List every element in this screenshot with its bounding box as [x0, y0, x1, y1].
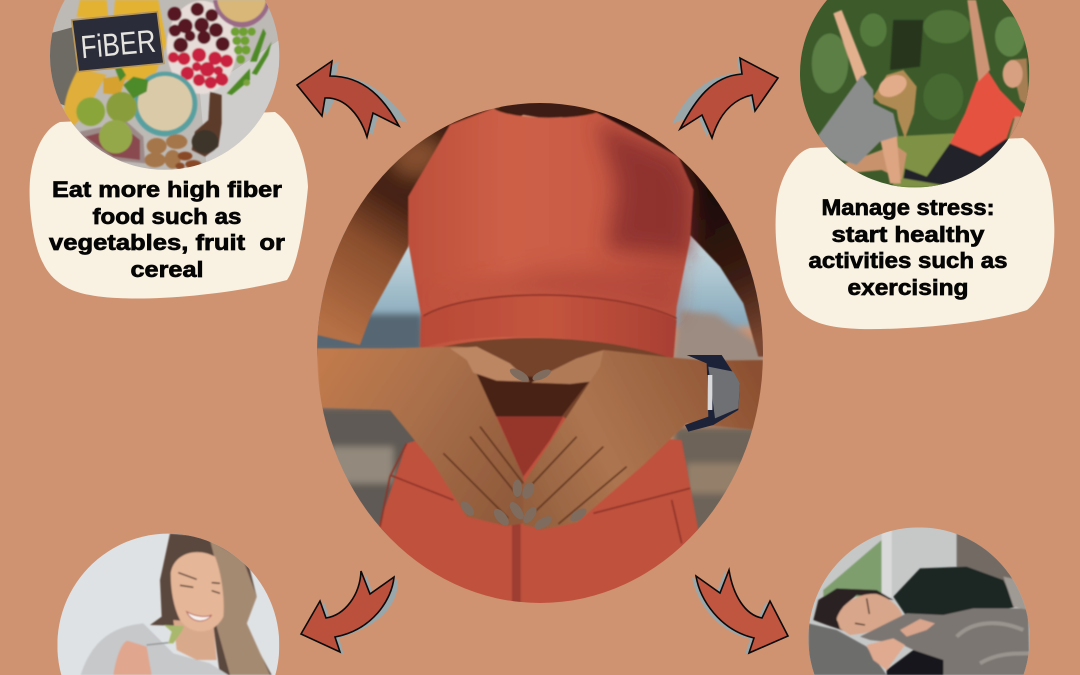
crop top band [422, 300, 678, 358]
shoulder highlight [387, 133, 447, 180]
photo backdrop: sky and rocks [310, 227, 770, 537]
photo: woman eating salad [57, 533, 279, 675]
face grey shirt [878, 74, 908, 98]
fork and salad [147, 643, 168, 645]
spoon with seeds [192, 92, 222, 157]
sleeve [887, 650, 943, 675]
chalkboard sign: FiBER [79, 23, 157, 65]
panel: manage stress [776, 0, 1054, 329]
curtains [957, 527, 1030, 594]
caption: stress [808, 195, 1008, 300]
left arm and shoulder [318, 107, 524, 346]
bananas [77, 0, 167, 80]
pillow [808, 623, 887, 675]
smart watch [685, 355, 740, 432]
window [823, 540, 882, 597]
head red shirt [1010, 58, 1029, 107]
arrow: to stress [672, 57, 778, 138]
hands [900, 619, 935, 637]
face [837, 594, 902, 635]
right hand and forearm [523, 350, 763, 529]
peas [231, 27, 256, 64]
hair [150, 533, 272, 675]
dark trousers [902, 138, 1008, 185]
pears [76, 97, 105, 126]
shadow on crop top [597, 120, 693, 257]
panel: high fiber food [30, 0, 308, 299]
grey shirt [815, 75, 898, 165]
shirt [81, 623, 228, 675]
thumbs [450, 347, 529, 382]
crop top [408, 108, 693, 360]
cherry and raspberry plate [167, 1, 237, 94]
grass [890, 133, 1013, 187]
red shirt [950, 72, 1024, 156]
cream text card [776, 138, 1054, 329]
arrow: to fiber [297, 61, 408, 137]
eyes and brows [178, 573, 220, 593]
hand [113, 641, 152, 675]
chalkboard sign [72, 12, 164, 72]
sweater [893, 567, 1017, 623]
fingernails [458, 366, 589, 532]
leaves [115, 65, 148, 98]
caption: fiber [49, 177, 285, 282]
caption: fiber: cereal [130, 257, 204, 282]
blonde hair [873, 70, 917, 138]
caption: fiber: food such as [92, 204, 242, 229]
caption: stress: start healthy [832, 222, 985, 247]
caption: stress: activities such as [808, 248, 1008, 273]
oat bowl [133, 72, 197, 136]
nuts [144, 134, 187, 169]
caption: stress: Manage stress: [822, 195, 994, 220]
right arm [562, 111, 763, 358]
smile [187, 612, 212, 621]
bean bowl [80, 122, 145, 163]
photo: woman sleeping [808, 527, 1030, 675]
midriff [443, 338, 672, 420]
arrow: to eating [301, 571, 398, 655]
blanket [860, 608, 1030, 675]
arm raised [967, 0, 990, 82]
finger gaps [443, 427, 627, 524]
central photo: hands forming a heart on belly [310, 100, 770, 607]
cream text card [30, 112, 308, 299]
yoga photo [800, 0, 1029, 187]
face [171, 552, 224, 631]
arrow: to sleep [692, 570, 788, 654]
chickpea bowl [213, 0, 270, 27]
neck [173, 620, 217, 660]
neckline [499, 103, 597, 119]
woman in grey: arm, leg [833, 10, 867, 82]
hair [813, 588, 893, 632]
food photo [50, 0, 279, 170]
left hand and forearm [317, 347, 530, 526]
caption: fiber: Eat more high fiber [52, 177, 282, 202]
leggings [378, 417, 698, 607]
caption: stress: exercising [848, 275, 968, 300]
caption: fiber: vegetables, fruit or [49, 230, 285, 255]
